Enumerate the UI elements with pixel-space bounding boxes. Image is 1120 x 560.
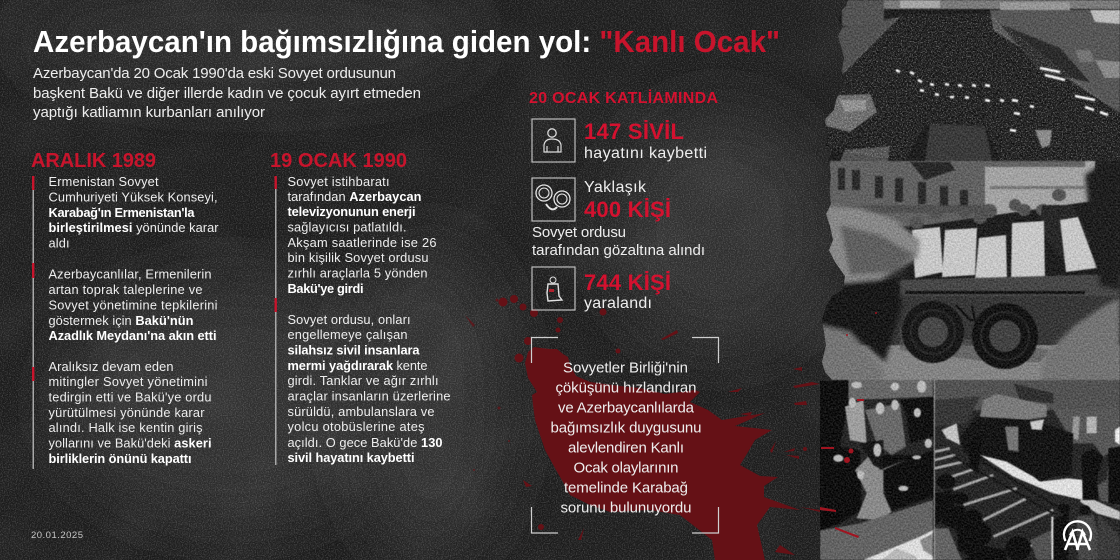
heading: 19 Ocak 1990: 19 OCAK 1990 xyxy=(270,150,407,172)
text block: Azerbaijani reaction: Azerbaycanlılar, Ermenilerin xyxy=(48,266,212,282)
stat: 400 people detained: Yaklaşık xyxy=(584,179,647,196)
text block: Karabağ decision xyxy=(48,174,219,250)
text block: Karabağ decision: Karabağ'ın Ermenistan'la xyxy=(48,205,195,220)
text block: Karabağ decision: aldı xyxy=(48,236,70,250)
text block: TV station: bin kişilik Sovyet ordusu xyxy=(288,250,428,265)
date: 20.01.2025 xyxy=(31,530,83,541)
red splashes on photos xyxy=(820,312,877,538)
text block: rallies: alındı. Halk ise kentin giriş xyxy=(48,420,202,435)
text block: Karabağ decision: birleştirilmesi yönünde karar xyxy=(48,220,219,235)
callout text: çöküşünü hızlandıran xyxy=(556,380,696,396)
text block: army entry: yolcu otobüslerine ateş xyxy=(288,419,424,434)
text block: rallies: yollarını ve Bakü'deki askeri xyxy=(48,436,212,450)
icon: injured person xyxy=(532,267,575,310)
text block: rallies: yürütülmesi yönünde karar xyxy=(48,405,205,420)
text block: TV station: Bakü'ye girdi xyxy=(288,281,364,296)
text block: army entry xyxy=(288,312,450,465)
stat: 147 civilians: 147 SİVİL xyxy=(584,119,684,144)
text block: rallies xyxy=(48,359,212,466)
photo: soldiers with riot shields on armoured vehicle xyxy=(820,161,1120,385)
text block: army entry: araçlar insanların üzerlerine xyxy=(288,388,450,404)
icon: handcuffs xyxy=(532,178,575,221)
stat: 400 people detained: Sovyet ordusu xyxy=(532,224,626,241)
text block: Azerbaijani reaction xyxy=(48,266,218,343)
subtitle: Azerbaycan'da 20 Ocak 1990'da eski Sovyet ordusunun xyxy=(33,65,396,82)
text block: TV station: televizyonunun enerji xyxy=(288,204,416,219)
text block: army entry: sivil hayatını kaybetti xyxy=(288,450,414,465)
text block: TV station xyxy=(288,174,436,296)
subtitle: yaptığı katliamın kurbanları anılıyor xyxy=(33,104,265,121)
stat: 744 injured: yaralandı xyxy=(584,295,652,312)
text block: army entry: açıldı. O gece Bakü'de 130 xyxy=(288,435,442,450)
timeline bar xyxy=(32,176,34,469)
photo: mourning women xyxy=(820,380,933,560)
text block: rallies: birliklerin önünü kapattı xyxy=(48,451,192,466)
stat: 400 people detained xyxy=(532,179,705,259)
timeline bar xyxy=(274,176,277,465)
photo: burial of victims xyxy=(933,380,1120,560)
text block: TV station: tarafından Azerbaycan xyxy=(288,189,422,204)
logo: Anadolu Agency xyxy=(1064,521,1091,550)
icon: person xyxy=(532,119,575,162)
text block: army entry: engellemeye çalışan xyxy=(288,327,408,342)
panel: 20 Ocak statistics xyxy=(529,89,718,312)
title: Azerbaycan'ın bağımsızlığına giden yol: "Kanlı Ocak" xyxy=(33,24,780,59)
subtitle xyxy=(33,65,421,121)
text block: Azerbaijani reaction: Azadlık Meydanı'na akın etti xyxy=(48,328,216,343)
column: Aralık 1989 xyxy=(31,150,219,469)
text block: TV station: sağlayıcısı patlatıldı. xyxy=(288,220,406,234)
stat: 744 injured xyxy=(584,270,671,312)
texture: crowd speckle xyxy=(825,14,1120,161)
corner brackets xyxy=(532,338,718,533)
photo: crowd at Azadlık Square xyxy=(820,0,1120,161)
callout text: ve Azerbaycanlılarda xyxy=(558,400,695,416)
text block: Azerbaijani reaction: artan toprak taleplerine ve xyxy=(48,282,202,297)
text block: rallies: Aralıksız devam eden xyxy=(48,359,174,374)
text block: TV station: Akşam saatlerinde ise 26 xyxy=(288,235,436,250)
stat: 400 people detained: tarafından gözaltına alındı xyxy=(532,242,705,259)
stat: 744 injured: 744 KİŞİ xyxy=(584,270,671,295)
text block: TV station: zırhlı araçlarla 5 yönden xyxy=(288,266,428,280)
callout text: Sovyetler Birliği'nin xyxy=(563,360,688,376)
text block: rallies: mitingler Sovyet yönetimini xyxy=(48,374,208,389)
text block: Azerbaijani reaction: Sovyet yönetimine tepkilerini xyxy=(48,298,218,312)
text block: army entry: silahsız sivil insanlara xyxy=(288,342,420,358)
text block: army entry: mermi yağdırarak kente xyxy=(288,358,428,373)
callout: Soviet collapse and Karabakh xyxy=(532,338,718,533)
text block: army entry: sürüldü, ambulanslara ve xyxy=(288,404,434,419)
text block: Karabağ decision: Cumhuriyeti Yüksek Konseyi, xyxy=(48,190,218,204)
text block: Karabağ decision: Ermenistan Sovyet xyxy=(48,174,159,189)
subtitle: başkent Bakü ve diğer illerde kadın ve çocuk ayırt etmeden xyxy=(33,85,421,102)
blood splatter xyxy=(465,295,820,560)
callout text: sorunu bulunuyordu xyxy=(560,500,692,516)
heading: 20 Ocak Katliamında: 20 OCAK KATLİAMINDA xyxy=(529,89,718,107)
text block: rallies: tedirgin etti ve Bakü'ye ordu xyxy=(48,390,212,404)
callout text: bağımsızlık duygusunu xyxy=(550,420,702,436)
heading: Aralık 1989: ARALIK 1989 xyxy=(31,150,156,172)
text block: army entry: Sovyet ordusu, onları xyxy=(288,312,410,327)
callout text: alevlendiren Kanlı xyxy=(568,440,684,456)
callout text: Ocak olaylarının xyxy=(574,460,678,476)
text block: Azerbaijani reaction: göstermek için Bakü'nün xyxy=(48,313,194,328)
stat: 147 civilians: hayatını kaybetti xyxy=(584,145,707,162)
text block: TV station: Sovyet istihbaratı xyxy=(288,174,390,189)
stat: 400 people detained: 400 KİŞİ xyxy=(584,197,671,222)
stat: 147 civilians xyxy=(584,119,707,162)
text block: army entry: girdi. Tanklar ve ağır zırhlı xyxy=(288,373,438,388)
photo collage xyxy=(820,0,1120,560)
callout text: temelinde Karabağ xyxy=(564,480,688,496)
column: 19 Ocak 1990 xyxy=(270,150,450,465)
callout text xyxy=(550,360,702,516)
